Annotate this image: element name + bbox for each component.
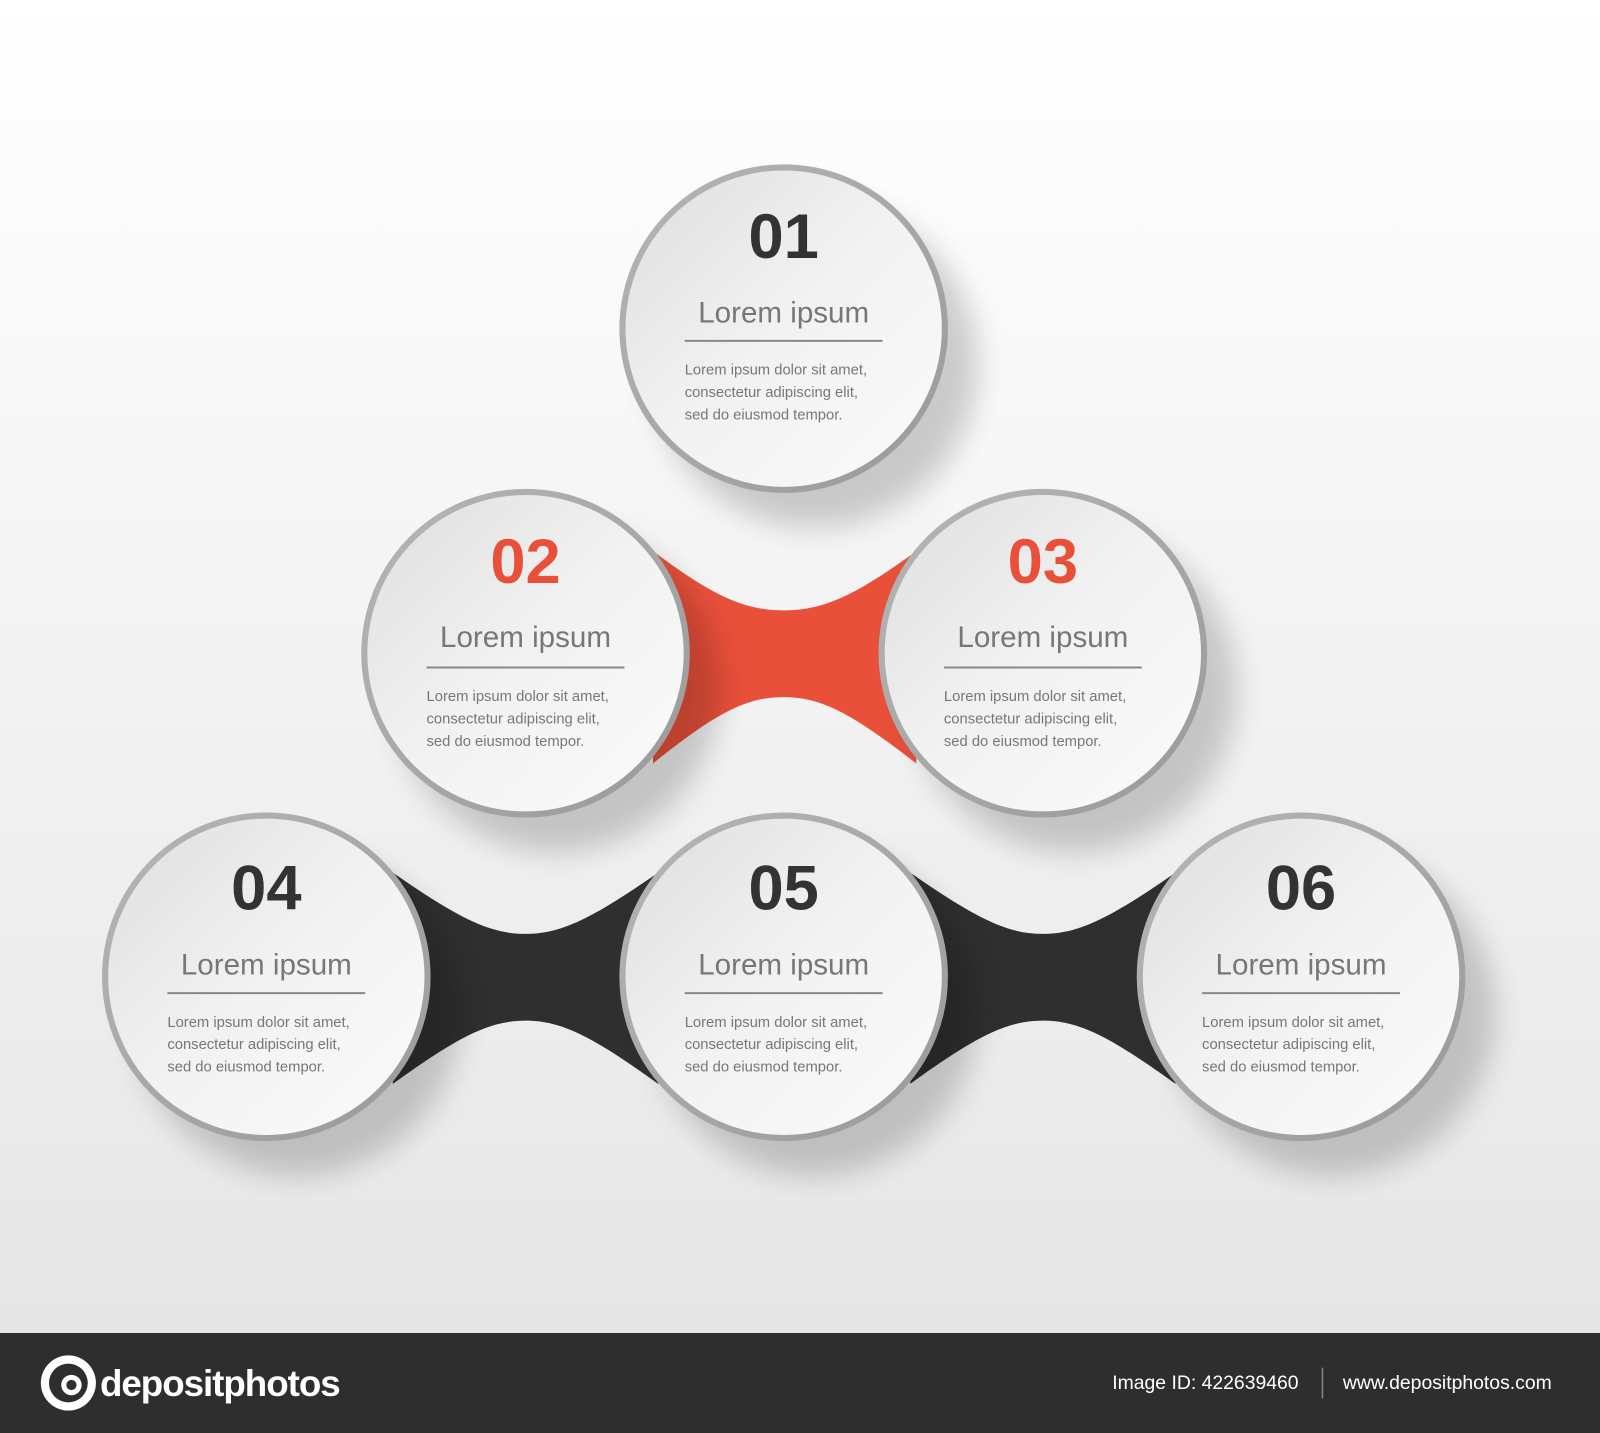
- step 01: sed do eiusmod tempor.: [685, 407, 842, 423]
- step 01: Lorem ipsum dolor sit amet,: [685, 363, 867, 379]
- step 03: 03: [1008, 527, 1078, 597]
- step 03: sed do eiusmod tempor.: [944, 734, 1102, 750]
- step 02: sed do eiusmod tempor.: [427, 734, 584, 750]
- icon: camera logo: [41, 1355, 96, 1411]
- step 04: Lorem ipsum dolor sit amet,: [167, 1015, 350, 1031]
- step 05: 05: [748, 853, 819, 923]
- footer bar: [0, 1333, 1600, 1433]
- step 04: consectetur adipiscing elit,: [167, 1037, 341, 1053]
- step 06: consectetur adipiscing elit,: [1202, 1037, 1375, 1053]
- connector: black 05-06: [910, 873, 1176, 1084]
- step 05: [622, 816, 978, 1176]
- step 05: Lorem ipsum dolor sit amet,: [685, 1015, 867, 1031]
- footer logo text: depositphotos: [100, 1363, 340, 1404]
- step 02: 02: [490, 527, 561, 597]
- step 01: consectetur adipiscing elit,: [685, 385, 858, 401]
- footer image id: Image ID: 422639460: [1112, 1372, 1299, 1394]
- step 02: [364, 492, 719, 852]
- step 06: [1140, 816, 1495, 1176]
- step 04: [105, 816, 460, 1176]
- footer url: www.depositphotos.com: [1342, 1372, 1552, 1394]
- connector: red 02-03: [653, 551, 916, 763]
- step 05: Lorem ipsum: [698, 949, 869, 982]
- step 04: 04: [231, 853, 302, 923]
- step 04: Lorem ipsum: [181, 949, 352, 982]
- step 01: Lorem ipsum: [698, 297, 869, 330]
- step 05: consectetur adipiscing elit,: [685, 1037, 858, 1053]
- step 05: sed do eiusmod tempor.: [685, 1060, 842, 1076]
- step 06: sed do eiusmod tempor.: [1202, 1060, 1360, 1076]
- step 01: [622, 167, 978, 528]
- step 06: Lorem ipsum dolor sit amet,: [1202, 1015, 1384, 1031]
- step 03: Lorem ipsum dolor sit amet,: [944, 689, 1126, 705]
- step 02: Lorem ipsum: [440, 621, 611, 654]
- step 02: Lorem ipsum dolor sit amet,: [427, 689, 609, 705]
- step 02: consectetur adipiscing elit,: [427, 712, 600, 728]
- step 03: [882, 492, 1237, 852]
- step 06: 06: [1266, 853, 1336, 923]
- step 06: Lorem ipsum: [1216, 949, 1386, 982]
- step 04: sed do eiusmod tempor.: [167, 1060, 325, 1076]
- step 01: 01: [748, 202, 819, 272]
- connector: black 04-05: [393, 873, 658, 1084]
- step 03: Lorem ipsum: [957, 621, 1128, 654]
- step 03: consectetur adipiscing elit,: [944, 712, 1117, 728]
